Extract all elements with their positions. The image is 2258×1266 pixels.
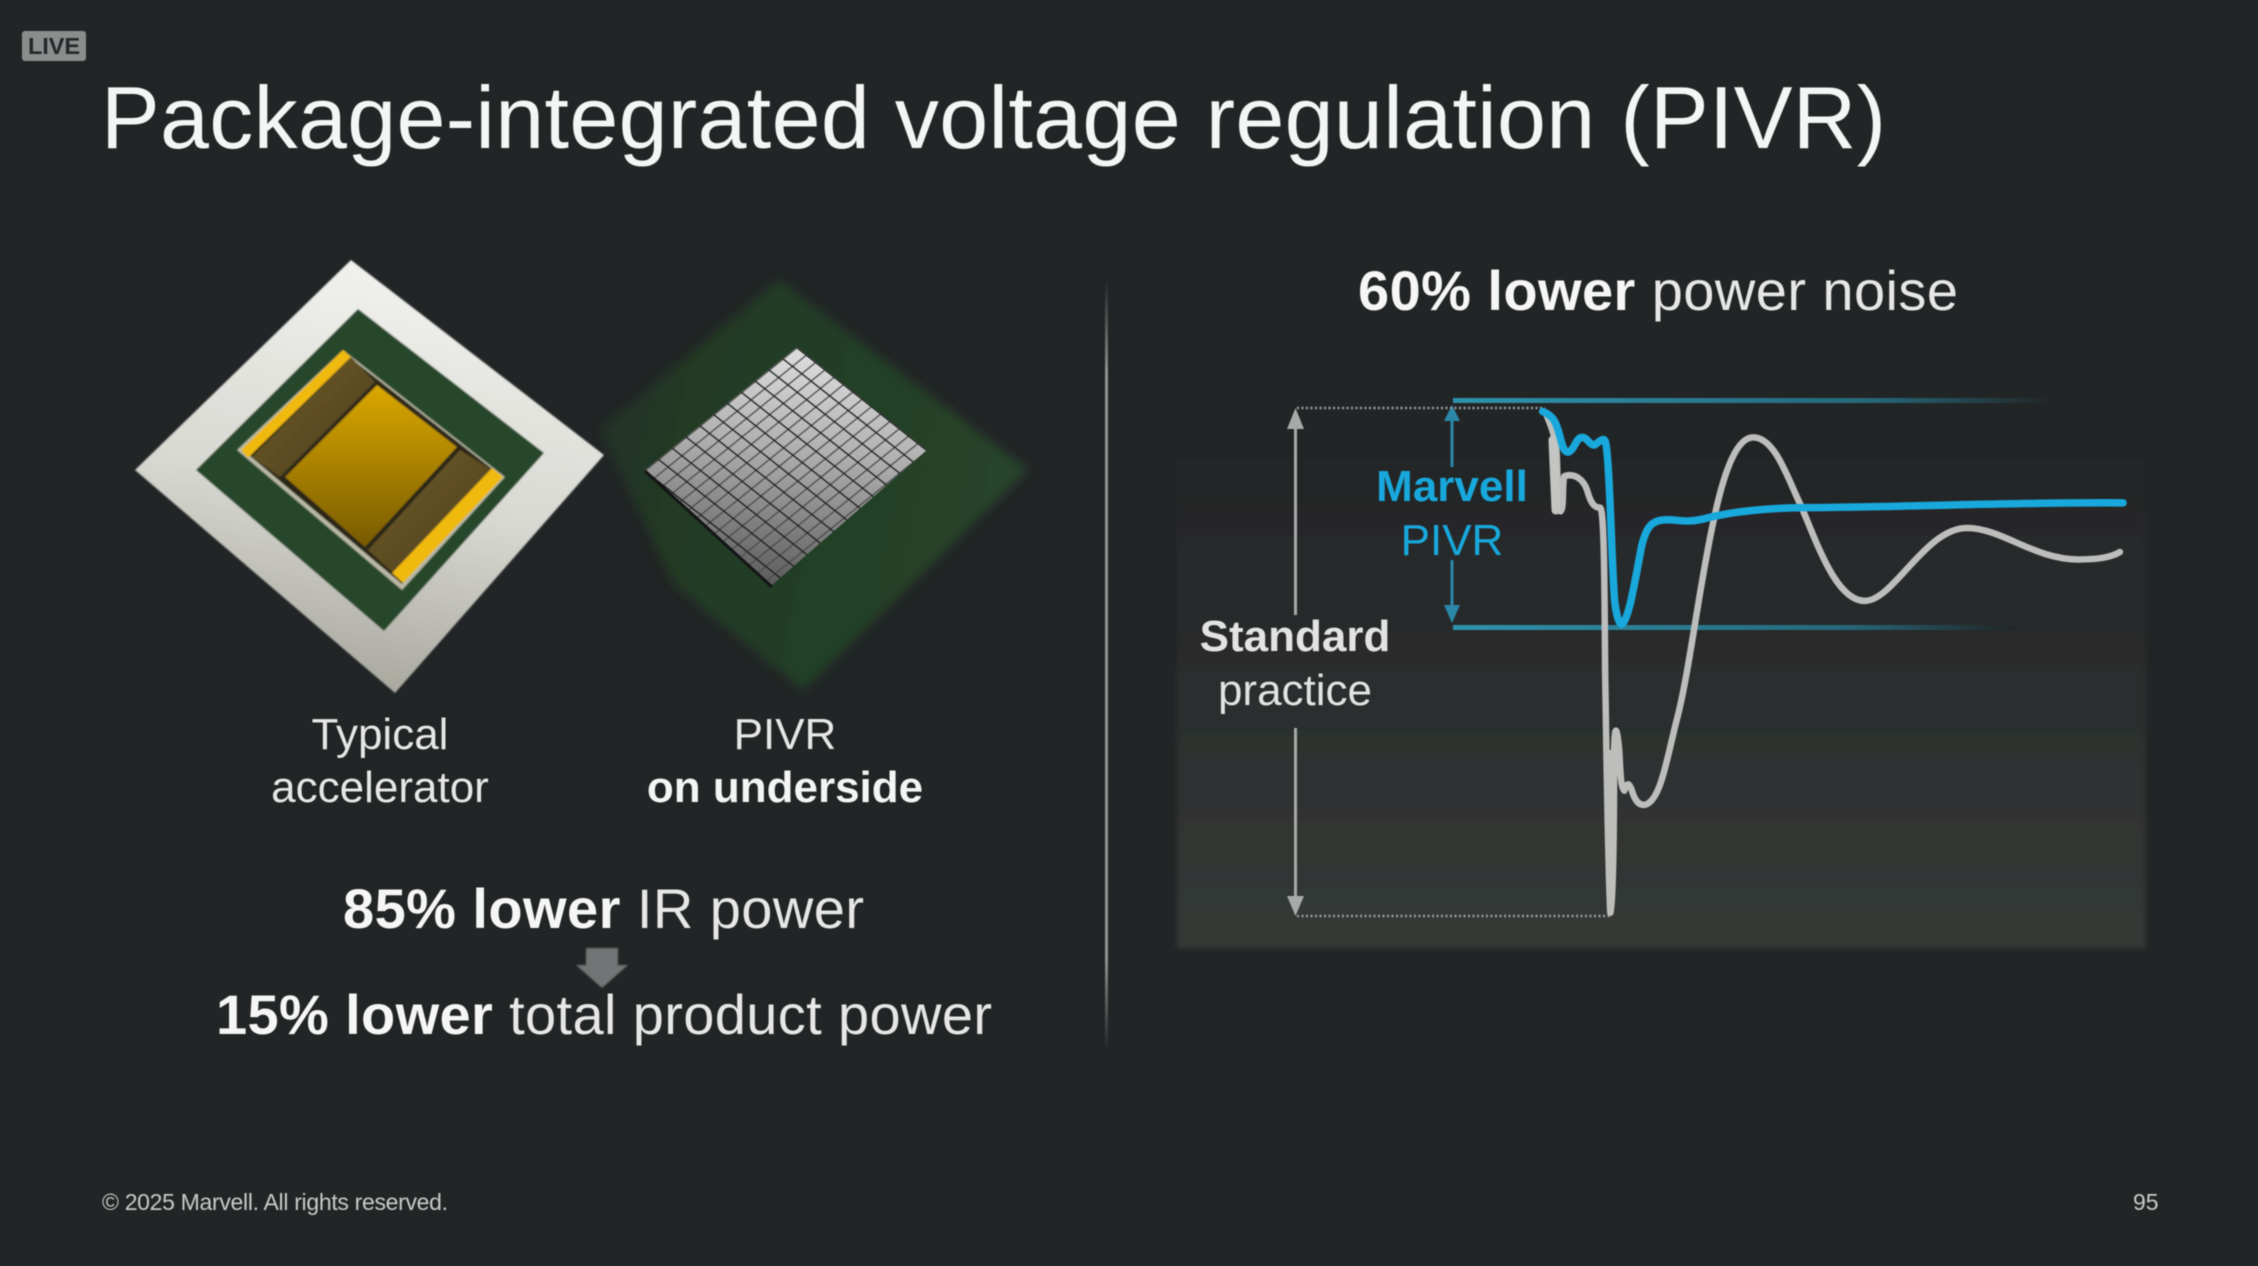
icon: typical accelerator package <box>135 260 604 693</box>
stat: 85% lower IR power: 85% lower IR power <box>343 877 864 940</box>
label: PIVR on underside: PIVR <box>734 710 836 759</box>
arrow: down <box>576 948 628 988</box>
footer: copyright: © 2025 Marvell. All rights reserved. <box>102 1189 448 1215</box>
panel: chip comparison <box>135 260 1028 693</box>
label: typical accelerator: Typical <box>312 710 448 759</box>
label: Marvell PIVR: Marvell <box>1376 462 1528 511</box>
curve: standard practice <box>1546 413 2120 916</box>
icon: PIVR package underside <box>600 280 1028 690</box>
chart background <box>1177 460 2146 948</box>
curve: Marvell PIVR <box>1543 411 2123 624</box>
title: Package-integrated voltage regulation (PIVR) <box>101 68 1886 167</box>
arrow: standard practice range <box>1287 408 1304 916</box>
label: Marvell PIVR: PIVR <box>1401 516 1503 565</box>
divider <box>1105 280 1108 1051</box>
label: PIVR on underside: on underside <box>647 763 923 812</box>
badge: LIVE: LIVE <box>28 33 80 59</box>
label: typical accelerator: accelerator <box>271 763 489 812</box>
dotted guides <box>1297 408 1610 916</box>
arrow: Marvell PIVR range <box>1444 405 1460 623</box>
stat: 15% lower total product power: 15% lower total product power <box>216 983 992 1046</box>
label: Standard practice: practice <box>1218 666 1372 715</box>
blue limit lines <box>1453 398 2053 630</box>
footer: page number: 95 <box>2133 1189 2159 1215</box>
label: Standard practice: Standard <box>1200 612 1390 661</box>
chart: voltage droop <box>1177 398 2146 948</box>
heading: 60% lower power noise: 60% lower power noise <box>1358 259 1958 322</box>
